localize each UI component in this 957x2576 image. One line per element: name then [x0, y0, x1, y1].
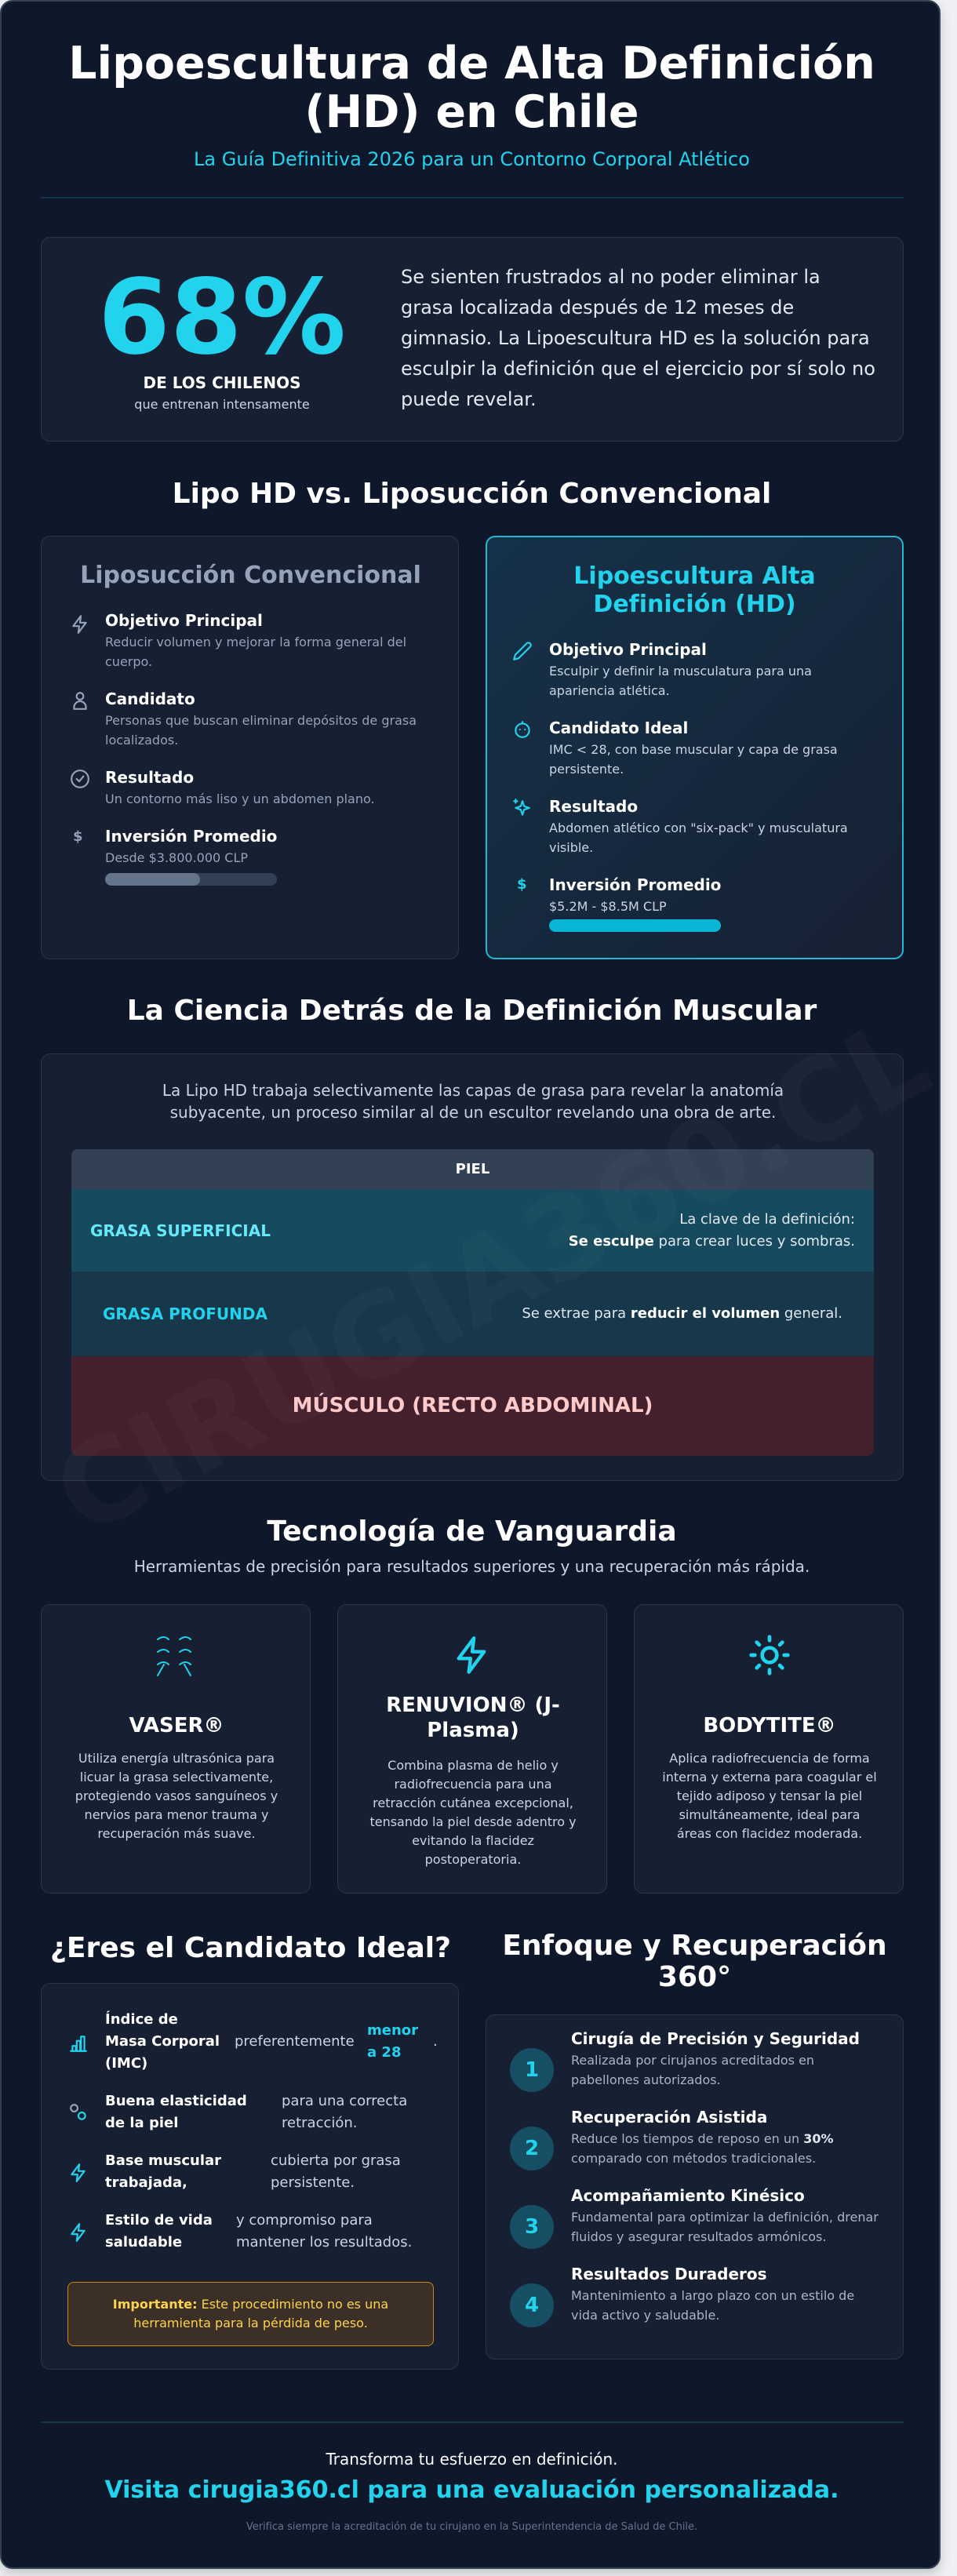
layer: grasa superficial — [71, 1190, 874, 1272]
panel: bodytite: tejido adiposo y tensar la piel — [677, 1788, 862, 1803]
step 1 — [510, 2029, 860, 2092]
item: objetivo — [105, 611, 406, 669]
panel: candidato: Masa Corporal — [105, 2033, 220, 2050]
panel: vaser: licuar la grasa selectivamente, — [80, 1770, 273, 1785]
step 3 — [510, 2186, 879, 2249]
step 2: comparado con métodos tradicionales. — [571, 2151, 816, 2166]
item: objetivo: Objetivo Principal — [105, 611, 263, 630]
panel: candidato: saludable — [105, 2234, 182, 2250]
panel: renuvion — [337, 1604, 607, 1894]
step 1: Realizada por cirujanos acreditados en — [571, 2053, 814, 2068]
stat text: gimnasio. La Lipoescultura HD es la solución para — [401, 327, 870, 349]
item: objetivo HD: Objetivo Principal — [549, 640, 707, 659]
panel: science — [41, 1053, 904, 1481]
item: inversion: Inversión Promedio — [105, 827, 277, 846]
step 1: pabellones autorizados. — [571, 2072, 721, 2087]
step 2: Reduce los tiempos de reposo en un 30% — [571, 2131, 833, 2146]
stat label: que entrenan intensamente — [134, 397, 310, 412]
item: inversion HD: $5.2M - $8.5M CLP — [549, 899, 667, 914]
panel: candidato: . — [433, 2033, 438, 2050]
panel: candidato: mantener los resultados. — [236, 2234, 412, 2250]
panel: HD: Definición (HD) — [593, 591, 796, 618]
item: elasticidad — [105, 2093, 407, 2131]
panel: conventional: Liposucción Convencional — [80, 562, 421, 589]
panel: candidato: Base muscular — [105, 2152, 221, 2169]
panel: vaser: protegiendo vasos sanguíneos y — [75, 1788, 278, 1803]
panel: stat — [41, 237, 904, 442]
item: candidato HD: IMC < 28, con base muscular y capa de grasa — [549, 742, 838, 757]
step 3: Fundamental para optimizar la definición, drenar — [571, 2210, 879, 2225]
heading: candidato: ¿Eres el Candidato Ideal? — [50, 1932, 451, 1964]
title — [68, 38, 875, 138]
panel: renuvion: evitando la flacidez — [412, 1833, 534, 1848]
step 4: 4 — [525, 2294, 539, 2317]
panel: vaser: VASER® — [129, 1714, 224, 1737]
item: inversion — [105, 827, 277, 865]
panel: candidato: Buena elasticidad — [105, 2093, 247, 2109]
layer: piel: PIEL — [456, 1161, 489, 1177]
item: resultado: Un contorno más liso y un abdomen plano. — [105, 791, 375, 806]
bar HD — [549, 919, 721, 932]
item: inversion HD: Inversión Promedio — [549, 875, 721, 894]
panel: vaser — [41, 1604, 311, 1894]
icon: bolt — [457, 1636, 486, 1674]
panel: candidato: para una correcta — [282, 2093, 407, 2109]
heading: technology: Tecnología de Vanguardia — [267, 1515, 677, 1548]
icon: chart — [70, 2036, 87, 2052]
panel: bodytite: BODYTITE® — [703, 1714, 836, 1737]
panel: recuperacion: Acompañamiento Kinésico — [571, 2186, 805, 2205]
item: objetivo: Reducir volumen y mejorar la forma general del — [105, 635, 406, 649]
item: candidato: Candidato — [105, 689, 195, 708]
callout: importante — [67, 2282, 434, 2346]
item: candidato HD — [549, 719, 838, 777]
layer: grasa superficial: GRASA SUPERFICIAL — [90, 1221, 271, 1240]
panel: renuvion: RENUVION® (J- — [386, 1694, 560, 1717]
layer: grasa profunda: Se extrae para reducir el volumen general. — [522, 1305, 842, 1322]
icon: bolt — [72, 615, 87, 634]
panel: candidato: menor — [367, 2022, 418, 2039]
item: objetivo HD: apariencia atlética. — [549, 683, 670, 698]
panel: conventional — [41, 536, 459, 959]
item: inversion: Desde $3.800.000 CLP — [105, 850, 248, 865]
panel: bodytite: Aplica radiofrecuencia de forma — [669, 1751, 870, 1766]
item: resultado HD: visible. — [549, 840, 593, 855]
step 4: vida activo y saludable. — [571, 2308, 719, 2323]
title: Lipoescultura de Alta Definición — [68, 38, 875, 89]
panel: candidato: a 28 — [367, 2044, 401, 2061]
panel: renuvion: radiofrecuencia para una — [394, 1777, 552, 1792]
panel: candidato: y compromiso para — [236, 2212, 373, 2229]
item: candidato HD: persistente. — [549, 762, 624, 777]
icon: user — [73, 692, 87, 710]
item: candidato: Personas que buscan eliminar depósitos de grasa — [105, 713, 417, 728]
panel: renuvion: postoperatoria. — [425, 1852, 521, 1867]
icon: sun — [749, 1635, 790, 1675]
stat text: Se sienten frustrados al no poder eliminar la — [401, 266, 821, 288]
item: candidato: localizados. — [105, 733, 178, 748]
item: candidato HD: Candidato Ideal — [549, 719, 688, 737]
stat text: puede revelar. — [401, 388, 537, 410]
footer: Verifica siempre la acreditación de tu cirujano en la Superintendencia de Salud de Chile. — [246, 2521, 697, 2533]
step 4 — [510, 2265, 854, 2327]
intro text: La Lipo HD trabaja selectivamente las capas de grasa para revelar la anatomía — [162, 1081, 784, 1100]
callout: importante: Importante: Este procedimiento no es una — [113, 2297, 388, 2312]
icon: sparkles — [513, 799, 530, 816]
item: resultado HD: Abdomen atlético con "six-pack" y musculatura — [549, 820, 848, 835]
panel: renuvion: Combina plasma de helio y — [388, 1758, 559, 1773]
item: inversion HD — [549, 875, 721, 914]
stat number: 68% — [98, 257, 346, 378]
stat label — [134, 373, 310, 412]
layer: grasa superficial: La clave de la definición: — [679, 1211, 855, 1228]
stat text: esculpir la definición que el ejercicio por sí solo no — [401, 358, 875, 380]
item: resultado — [105, 768, 375, 806]
item: resultado HD: Resultado — [549, 797, 638, 816]
layer diagram — [71, 1149, 874, 1456]
heading: recuperacion — [502, 1930, 887, 1993]
heading: comparison: Lipo HD vs. Liposucción Convencional — [173, 478, 771, 510]
panel: renuvion: tensando la piel desde adentro y — [369, 1814, 577, 1829]
footer: Visita cirugia360.cl para una evaluación personalizada. — [104, 2476, 839, 2504]
panel: candidato: Índice de — [105, 2011, 178, 2028]
subtitle: La Guía Definitiva 2026 para un Contorno Corporal Atlético — [194, 148, 750, 170]
footer — [104, 2450, 839, 2533]
panel: candidato: persistente. — [271, 2174, 355, 2191]
callout: importante: herramienta para la pérdida de peso. — [133, 2316, 368, 2330]
panel: bodytite: áreas con flacidez moderada. — [677, 1826, 862, 1841]
panel: recuperacion: Resultados Duraderos — [571, 2265, 767, 2283]
panel: renuvion: retracción cutánea excepcional, — [373, 1796, 573, 1810]
footer: Transforma tu esfuerzo en definición. — [326, 2450, 618, 2469]
panel: vaser: recuperación más suave. — [97, 1826, 256, 1841]
panel: HD: Lipoescultura Alta — [573, 562, 816, 590]
heading: science: La Ciencia Detrás de la Definición Muscular — [127, 995, 817, 1027]
stat text — [401, 266, 875, 410]
item: estilo de vida — [105, 2212, 412, 2250]
panel: bodytite — [634, 1604, 904, 1894]
step 2 — [510, 2108, 833, 2170]
panel: HD — [486, 536, 904, 959]
layer: grasa profunda: GRASA PROFUNDA — [103, 1304, 267, 1323]
icon: dollar: $ — [73, 828, 83, 845]
panel: candidato: de la piel — [105, 2115, 178, 2131]
intro text: subyacente, un proceso similar al de un escultor revelando una obra de arte. — [170, 1103, 776, 1122]
panel: recuperacion — [486, 2014, 904, 2360]
step 3: fluidos y asegurar resultados armónicos. — [571, 2229, 826, 2244]
step 1: 1 — [525, 2058, 539, 2082]
layer: musculo: MÚSCULO (RECTO ABDOMINAL) — [293, 1394, 653, 1417]
icon: waves — [157, 1636, 191, 1676]
icon: bolt 2 — [71, 2223, 86, 2242]
item: base muscular — [105, 2152, 401, 2191]
panel: vaser: nervios para menor trauma y — [85, 1807, 268, 1822]
item: candidato — [105, 689, 417, 748]
layer: piel — [71, 1149, 874, 1190]
heading: recuperacion: 360° — [658, 1961, 731, 1993]
icon: dollar HD: $ — [517, 876, 527, 893]
icon: circles — [70, 2104, 86, 2120]
step 4: Mantenimiento a largo plazo con un estilo de — [571, 2288, 854, 2303]
layer: grasa superficial: Se esculpe para crear luces y sombras. — [569, 1233, 855, 1250]
item: objetivo HD: Esculpir y definir la musculatura para una — [549, 664, 812, 679]
item: IMC — [105, 2011, 438, 2072]
panel: candidato: Estilo de vida — [105, 2212, 213, 2229]
watermark: CIRUGIA360.CL — [34, 991, 941, 1562]
subheading technology: Herramientas de precisión para resultados superiores y una recuperación más rápida. — [134, 1557, 810, 1576]
stat label: DE LOS CHILENOS — [143, 373, 301, 392]
panel: candidato: preferentemente — [235, 2033, 355, 2050]
panel: candidato — [41, 1983, 459, 2370]
icon: pencil — [513, 642, 532, 660]
step 3: 3 — [525, 2215, 539, 2239]
layer: musculo — [71, 1356, 874, 1456]
panel: bodytite: simultáneamente, ideal para — [679, 1807, 860, 1822]
panel: candidato: (IMC) — [105, 2055, 147, 2072]
panel: candidato: retracción. — [282, 2115, 358, 2131]
title: (HD) en Chile — [304, 86, 639, 138]
heading: recuperacion: Enfoque y Recuperación — [502, 1930, 887, 1962]
icon: face — [515, 721, 530, 738]
icon: check — [71, 770, 89, 788]
panel: bodytite: interna y externa para coagular el — [662, 1770, 877, 1785]
item: resultado: Resultado — [105, 768, 194, 787]
layer: grasa profunda — [71, 1272, 874, 1356]
panel: recuperacion: Recuperación Asistida — [571, 2108, 767, 2127]
panel: renuvion: Plasma) — [427, 1719, 519, 1742]
panel: candidato: cubierta por grasa — [271, 2152, 401, 2169]
intro text — [162, 1081, 784, 1122]
panel: vaser: Utiliza energía ultrasónica para — [78, 1751, 275, 1766]
item: objetivo: cuerpo. — [105, 654, 152, 669]
stat text: grasa localizada después de 12 meses de — [401, 297, 794, 318]
item: resultado HD — [549, 797, 848, 855]
icon: bolt 1 — [71, 2163, 86, 2182]
item: objetivo HD — [549, 640, 812, 698]
bar — [105, 873, 277, 886]
panel: recuperacion: Cirugía de Precisión y Seguridad — [571, 2029, 860, 2048]
panel: candidato: trabajada, — [105, 2174, 187, 2191]
step 2: 2 — [525, 2137, 539, 2160]
